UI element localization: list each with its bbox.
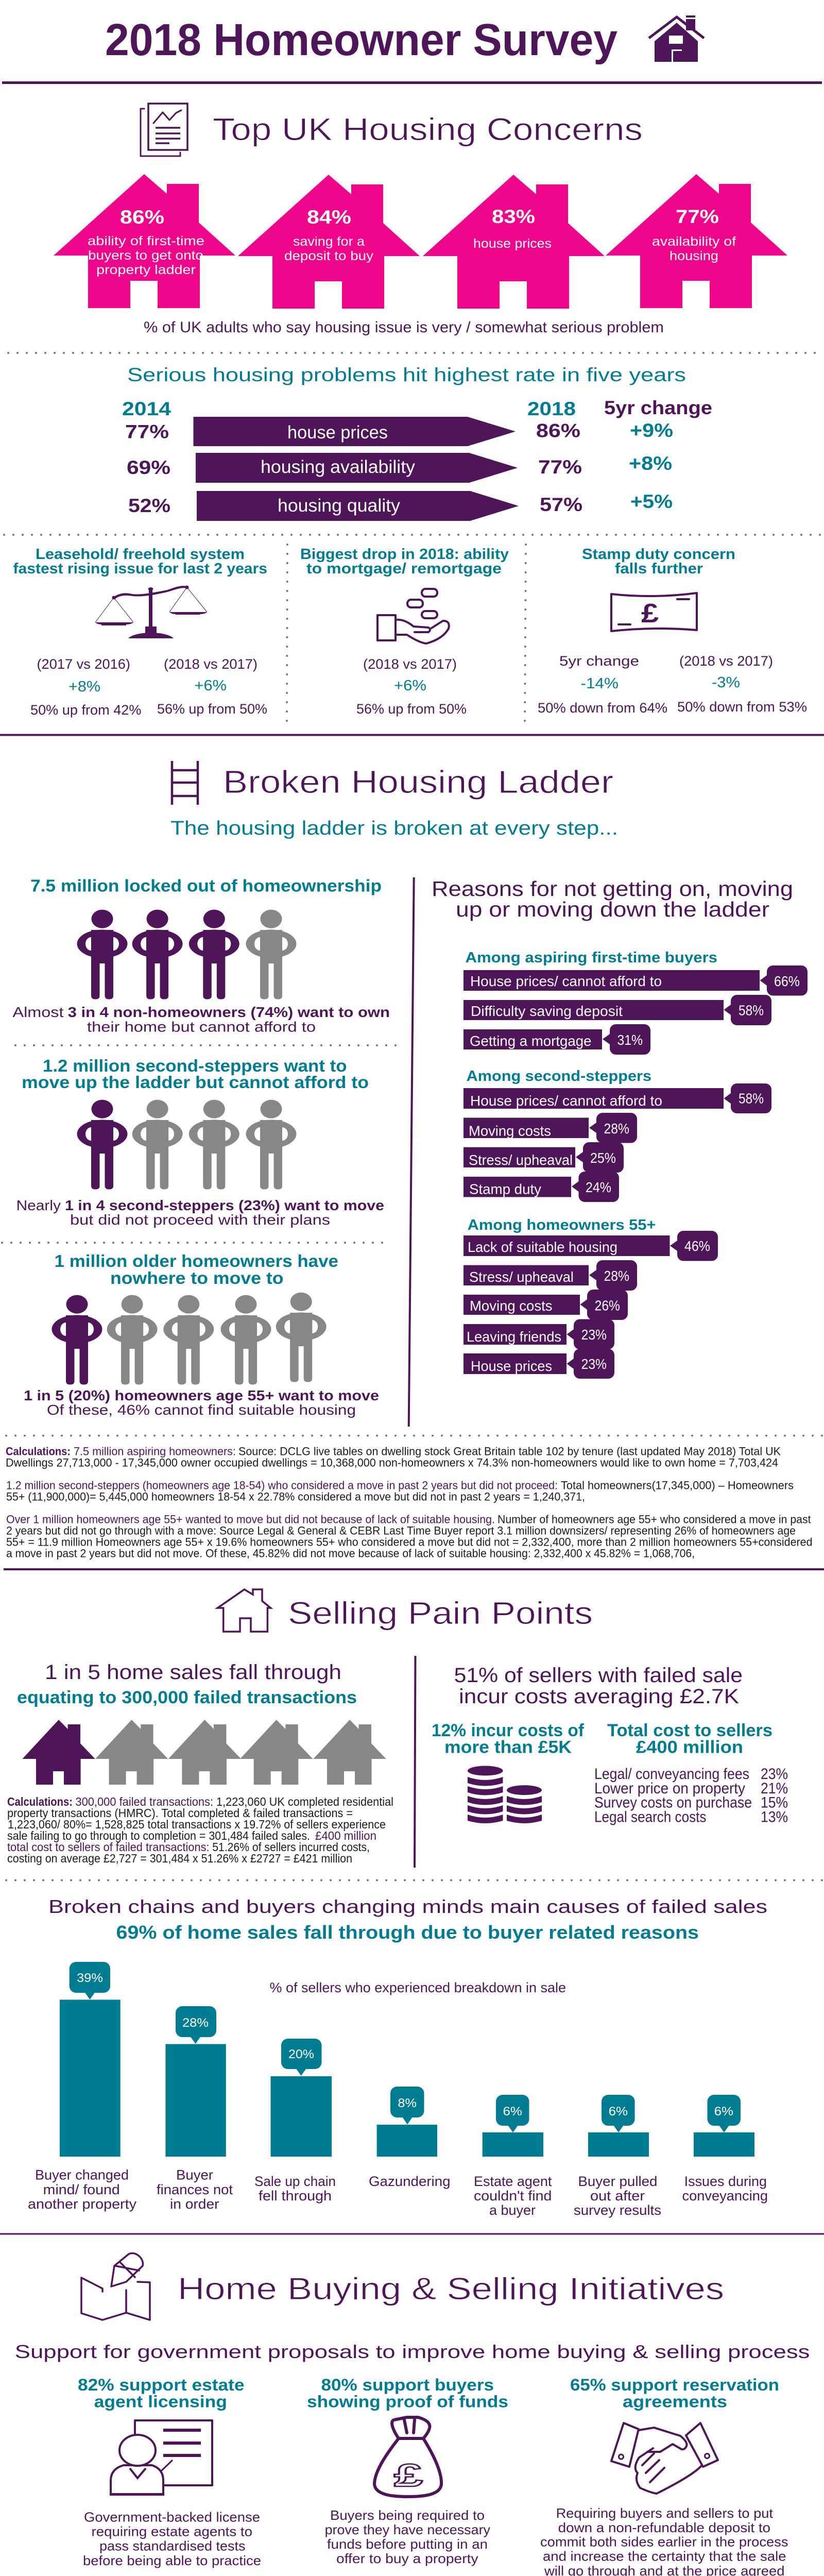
description: down a non-refundable deposit to xyxy=(558,2520,770,2535)
row: housing availability: housing availability xyxy=(261,457,416,477)
row: housing quality: 52% xyxy=(128,495,170,516)
bar: moving costs 26%: Moving costs xyxy=(470,1298,552,1314)
icon: ladder xyxy=(172,761,198,805)
icon: hand with coins xyxy=(377,589,449,643)
bar: stress upheaval 25% xyxy=(464,1142,624,1173)
subheading: 12%: more than £5K xyxy=(444,1738,572,1757)
heading: incur costs averaging £2.7K xyxy=(459,1685,739,1708)
bar: getting a mortgage 31% xyxy=(464,1024,650,1055)
column headers: 5yr change xyxy=(604,397,712,418)
heading: 82% support estate xyxy=(78,2376,244,2394)
chart caption: % of sellers who experienced breakdown in sale xyxy=(270,1980,566,1995)
heading: Biggest drop in 2018: ability xyxy=(300,546,509,563)
comparison figures: +6% xyxy=(394,677,426,694)
caption: Nearly xyxy=(16,1197,61,1213)
description xyxy=(83,2509,261,2568)
text block: ladder calculations: 55+ = 11.9 million Homeowners age 55+ x 19.6% homeowners 55+ who considered a move but did not = 2,332,400, more than 2 million homeowners 55+considered xyxy=(6,1535,813,1548)
caption: 1 in 4 second-steppers (23%) want to move xyxy=(65,1197,384,1213)
house: 77%: housing xyxy=(670,249,718,263)
bar: buyer changed mind 39%: mind/ found xyxy=(43,2182,120,2197)
icon: map and pencil xyxy=(81,2253,150,2320)
text block: calculations: £400 million xyxy=(315,1829,376,1842)
description: funds before putting in an xyxy=(327,2536,488,2552)
subheading: total cost: Total cost to sellers xyxy=(607,1721,772,1740)
description: requiring estate agents to xyxy=(92,2523,252,2539)
icon: money bag: £ xyxy=(394,2458,423,2494)
section header: home buying and selling initiatives xyxy=(81,2253,724,2320)
bar: buyer changed mind 39%: Buyer changed xyxy=(35,2167,129,2182)
bar: house prices 66%: House prices/ cannot afford to xyxy=(470,973,662,989)
bar: buyer finances 28% xyxy=(157,2006,233,2212)
heading xyxy=(78,2376,244,2411)
bar: buyer pulled out 6% xyxy=(574,2095,661,2218)
heading: 1 million older homeowners have xyxy=(55,1251,338,1270)
house: 77%: availability of xyxy=(652,234,736,249)
subheading: The housing ladder is broken at every step... xyxy=(170,818,618,839)
table: cost breakdown: Lower price on property xyxy=(594,1780,745,1797)
row: housing availability: 77% xyxy=(538,456,582,478)
icon: presenter with board xyxy=(110,2420,212,2496)
description: pass standardised tests xyxy=(99,2538,245,2553)
heading xyxy=(55,1251,338,1287)
subheading: 12%: 12% incur costs of xyxy=(432,1721,585,1740)
icon: house outline xyxy=(217,1589,271,1632)
subheading: first-time buyers: Among aspiring first-time buyers xyxy=(466,950,717,966)
house: 86%: 86% xyxy=(120,207,164,228)
description: offer to buy a property xyxy=(336,2551,478,2566)
description: Buyers being required to xyxy=(330,2507,485,2523)
heading: Serious housing problems hit highest rate in five years xyxy=(127,364,686,385)
bar: estate agent 6%: Estate agent xyxy=(474,2174,552,2189)
icon: house xyxy=(649,15,704,62)
bar: estate agent 6%: couldn't find xyxy=(474,2188,552,2204)
bar: getting a mortgage 31%: 31% xyxy=(617,1032,643,1048)
heading xyxy=(454,1664,743,1708)
row: house prices: 86% xyxy=(536,420,580,441)
text block: calculations: 300,000 failed transactions xyxy=(75,1795,210,1808)
comparison figures: +8% xyxy=(68,679,100,695)
description: prove they have necessary xyxy=(325,2522,490,2537)
table: cost breakdown: Survey costs on purchase xyxy=(594,1794,752,1811)
caption: their home but cannot afford to xyxy=(87,1019,316,1035)
panel: stamp duty xyxy=(538,546,807,716)
icon: handshake xyxy=(611,2423,718,2494)
caption xyxy=(24,1387,379,1418)
text block: calculations: total cost to sellers of failed transactions xyxy=(7,1840,206,1854)
bar: stamp duty 24%: 24% xyxy=(586,1179,611,1195)
caption: 3 in 4 non-homeowners (74%) want to own xyxy=(68,1004,390,1020)
comparison figures: +6% xyxy=(195,677,227,694)
people icons: 1 of 4 xyxy=(77,1100,297,1189)
text block: calculations: : 51.26% of sellers incurred costs, xyxy=(206,1840,370,1854)
bar: sale up chain 20%: Sale up chain xyxy=(254,2174,336,2189)
bar: getting a mortgage 31%: Getting a mortgage xyxy=(470,1033,591,1049)
text block: ladder calculations: Number of homeowners age 55+ who considered a move in past xyxy=(497,1513,811,1526)
table: cost breakdown: 23% xyxy=(761,1766,788,1783)
bar: buyer changed mind 39%: 39% xyxy=(77,1971,103,1985)
caption xyxy=(12,1004,390,1035)
row: housing quality: +5% xyxy=(630,491,673,512)
text block: ladder calculations: 1.2 million second-steppers (homeowners age 18-54) who considered a move in past 2 years but did not proceed: xyxy=(6,1479,558,1492)
bar: buyer pulled out 6%: survey results xyxy=(574,2202,661,2218)
row: house prices: +9% xyxy=(630,420,673,441)
table: cost breakdown: 15% xyxy=(761,1794,788,1811)
house: 83%: house prices xyxy=(473,236,552,251)
heading xyxy=(300,546,509,577)
bar: stress upheaval 28%: Stress/ upheaval xyxy=(469,1269,574,1285)
section: top UK housing concerns xyxy=(54,104,787,336)
bar: stress upheaval 25%: Stress/ upheaval xyxy=(469,1152,573,1168)
panel: second-steppers xyxy=(16,1056,384,1228)
bar: lack of suitable housing 46% xyxy=(464,1231,718,1261)
caption: Of these, 46% cannot find suitable housing xyxy=(47,1402,356,1418)
comparison figures: 5yr change xyxy=(559,653,639,669)
bar: lack of suitable housing 46%: 46% xyxy=(684,1238,710,1254)
heading: falls further xyxy=(615,561,703,577)
bar chart xyxy=(28,1962,768,2218)
table: cost breakdown xyxy=(594,1766,788,1826)
heading xyxy=(13,546,267,577)
text block: calculations: property transactions (HMRC). Total completed & failed transactions = xyxy=(7,1806,353,1820)
section: serious housing problems xyxy=(122,364,712,521)
subheading: second-steppers: Among second-steppers xyxy=(467,1068,651,1084)
bar: sale up chain 20% xyxy=(254,2039,336,2204)
section: causes of failed sales xyxy=(28,1896,768,2218)
heading: 65% support reservation xyxy=(570,2376,779,2394)
house icons: 1 of 5 xyxy=(22,1720,386,1785)
people icons: 3 of 4 xyxy=(77,910,297,999)
bar: moving costs 28%: 28% xyxy=(604,1121,629,1137)
comparison figures xyxy=(538,653,807,716)
text block: calculations xyxy=(7,1795,393,1865)
bar: house prices 66%: 66% xyxy=(774,973,800,989)
row: house prices: house prices xyxy=(287,422,388,443)
row: housing quality xyxy=(128,491,673,521)
house: 77% xyxy=(606,174,787,308)
heading: nowhere to move to xyxy=(110,1268,283,1287)
heading: top UK housing concerns: Top UK Housing Concerns xyxy=(213,112,643,147)
people icons: 1 of 5 xyxy=(52,1293,327,1385)
heading xyxy=(582,546,735,577)
heading: Reasons for not getting on, moving xyxy=(432,877,793,901)
title: 2018 Homeowner Survey xyxy=(105,15,617,65)
panel: reasons chart xyxy=(432,877,808,1379)
bar: estate agent 6%: 6% xyxy=(503,2105,522,2119)
subheading: 12% xyxy=(432,1721,585,1757)
heading: up or moving down the ladder xyxy=(456,897,769,921)
bar: house prices 58%: House prices/ cannot afford to xyxy=(470,1093,662,1109)
bar: house prices 23%: 23% xyxy=(581,1356,607,1372)
bar: stress upheaval 25%: 25% xyxy=(590,1150,616,1166)
subheading: total cost: £400 million xyxy=(636,1738,743,1757)
bar: sale up chain 20%: 20% xyxy=(288,2047,314,2061)
row: house prices xyxy=(125,417,673,446)
house: 84%: deposit to buy xyxy=(284,249,374,263)
heading: Broken Housing Ladder xyxy=(223,765,613,800)
bar: stress upheaval 28%: 28% xyxy=(604,1268,629,1284)
text block: ladder calculations: Source: DCLG live tables on dwelling stock Great Britain table 102 by tenure (last updated May 2018) Total UK xyxy=(238,1445,781,1458)
text block: ladder calculations: Over 1 million homeowners age 55+ wanted to move but did not because of lack of suitable housing. xyxy=(6,1513,495,1526)
section header: selling pain points xyxy=(217,1589,593,1632)
heading: Broken chains and buyers changing minds main causes of failed sales xyxy=(48,1896,767,1917)
heading: agent licensing xyxy=(94,2393,227,2411)
house: 83% xyxy=(423,175,605,309)
comparison figures: 50% up from 42% xyxy=(30,702,141,718)
description: Requiring buyers and sellers to put xyxy=(556,2505,774,2521)
table: cost breakdown: Legal search costs xyxy=(594,1809,706,1826)
bar: house prices 23% xyxy=(464,1349,614,1379)
bar: stamp duty 24% xyxy=(464,1172,619,1202)
heading: Home Buying & Selling Initiatives xyxy=(178,2272,724,2306)
heading: move up the ladder but cannot afford to xyxy=(22,1073,369,1092)
heading xyxy=(432,877,793,921)
house: 86%: buyers to get onto xyxy=(88,248,203,263)
column headers xyxy=(122,397,712,419)
bar: stamp duty 24%: Stamp duty xyxy=(469,1181,541,1197)
table: cost breakdown: 13% xyxy=(761,1809,788,1826)
bar: leaving friends 23% xyxy=(464,1319,614,1349)
bar: stress upheaval 28% xyxy=(464,1260,637,1291)
bar: issues during conveyancing 6%: 6% xyxy=(714,2105,733,2119)
bar: buyer finances 28%: 28% xyxy=(182,2016,209,2030)
bar: moving costs 26%: 26% xyxy=(595,1297,620,1314)
heading: 51% of sellers with failed sale xyxy=(454,1664,743,1687)
bar: difficulty saving deposit 58% xyxy=(464,995,771,1025)
house: 84%: 84% xyxy=(307,207,351,228)
text block: calculations: : 1,223,060 UK completed residential xyxy=(210,1795,393,1808)
comparison figures: (2018 vs 2017) xyxy=(164,656,258,672)
bar: house prices 23%: House prices xyxy=(471,1358,552,1374)
bar: house prices 58%: 58% xyxy=(739,1090,764,1107)
panel: seller costs xyxy=(432,1664,788,1826)
heading: to mortgage/ remortgage xyxy=(306,561,502,577)
heading: fastest rising issue for last 2 years xyxy=(13,561,267,577)
row: housing quality: housing quality xyxy=(278,496,401,516)
description: commit both sides earlier in the process xyxy=(540,2534,788,2550)
bar: moving costs 28% xyxy=(464,1113,637,1143)
caption: % of UK adults who say housing issue is very / somewhat serious problem xyxy=(144,319,664,336)
bar: difficulty saving deposit 58%: Difficulty saving deposit xyxy=(471,1003,623,1019)
panel: failed sales xyxy=(7,1661,393,1865)
description xyxy=(540,2505,788,2576)
text block: calculations: Calculations: xyxy=(7,1795,73,1808)
panel: older homeowners xyxy=(24,1251,379,1418)
description: Government-backed license xyxy=(84,2509,260,2524)
house: 86% xyxy=(54,174,235,308)
heading: government proposals: Support for government proposals to improve home buying & selling process xyxy=(15,2341,810,2362)
icon: scales xyxy=(95,585,207,638)
text block: ladder calculations xyxy=(6,1445,813,1560)
comparison figures: (2018 vs 2017) xyxy=(679,653,773,669)
bar: estate agent 6%: a buyer xyxy=(489,2202,536,2218)
text block: ladder calculations: 55+ (11,900,000)= 5,445,000 homeowners 18-54 x 22.78% considered a move but did not in past 2 years = 1,240,371, xyxy=(6,1490,585,1503)
bar: gazundering 8% xyxy=(369,2087,450,2189)
bar: house prices 58% xyxy=(464,1083,771,1113)
heading: showing proof of funds xyxy=(307,2393,508,2411)
icon: money bag xyxy=(374,2417,441,2497)
bar: leaving friends 23%: Leaving friends xyxy=(467,1329,561,1345)
heading: Stamp duty concern xyxy=(582,546,735,563)
bar: buyer pulled out 6%: 6% xyxy=(609,2105,628,2119)
bar: house prices 66% xyxy=(464,965,808,995)
panel: locked out xyxy=(12,876,390,1035)
row: housing availability: +8% xyxy=(629,453,672,474)
bar: gazundering 8%: 8% xyxy=(398,2096,417,2110)
comparison figures: 56% up from 50% xyxy=(157,701,267,717)
table: cost breakdown: 21% xyxy=(761,1780,788,1797)
panel: reservation agreements xyxy=(540,2376,788,2576)
bar: estate agent 6% xyxy=(474,2095,552,2218)
comparison figures: 50% down from 53% xyxy=(677,699,807,715)
bar: moving costs 28%: Moving costs xyxy=(469,1123,551,1139)
house: 84%: saving for a xyxy=(293,234,365,249)
text block: ladder calculations: Dwellings 27,713,000 - 17,345,000 owner occupied dwellings = 10,368,000 non-homeowners x 74.3% non-homeowners would like to own home = 7,703,424 xyxy=(6,1456,778,1469)
description xyxy=(325,2507,490,2566)
icon: banknote: £ xyxy=(641,599,659,629)
heading: Selling Pain Points xyxy=(288,1596,593,1631)
bar: buyer finances 28%: finances not xyxy=(157,2182,233,2197)
comparison figures xyxy=(30,656,267,718)
panel: leasehold freehold xyxy=(13,546,267,718)
caption xyxy=(16,1197,384,1228)
text block: ladder calculations: Calculations: xyxy=(6,1445,71,1458)
bar: issues during conveyancing 6%: Issues during xyxy=(684,2174,767,2189)
subheading: homeowners 55+: Among homeowners 55+ xyxy=(468,1217,656,1233)
section header: broken housing ladder xyxy=(170,761,618,839)
icon: banknote xyxy=(611,593,697,631)
heading: agreements xyxy=(623,2393,727,2411)
caption: 1 in 5 (20%) homeowners age 55+ want to move xyxy=(24,1387,379,1403)
column headers: 2014 xyxy=(122,398,171,419)
text block: calculations: costing on average £2,727 = 301,484 x 51.26% x £2727 = £421 million xyxy=(7,1852,352,1865)
text block: ladder calculations: Total homeowners(17,345,000) – Homeowners xyxy=(561,1479,794,1492)
heading: 80% support buyers xyxy=(321,2376,494,2394)
house: 83%: 83% xyxy=(492,206,535,227)
heading: Leasehold/ freehold system xyxy=(36,546,245,563)
row: housing availability xyxy=(127,453,672,483)
subheading: 69% of home sales fall through due to buyer related reasons xyxy=(116,1922,699,1943)
caption: Almost xyxy=(12,1004,64,1020)
text block: ladder calculations: a move in past 2 years but did not move. Of these, 45.82% did not move because of lack of suitable housing: 2,332,400 x 45.82% = 1,068,706, xyxy=(6,1547,695,1560)
comparison figures xyxy=(356,656,467,717)
icon: coin stacks xyxy=(468,1766,542,1823)
subheading: total cost xyxy=(607,1721,772,1757)
text block: calculations: 1,223,060/ 80%= 1,528,825 total transactions x 19.72% of sellers experience xyxy=(8,1818,386,1831)
row: housing quality: 57% xyxy=(540,494,582,515)
bar: lack of suitable housing 46%: Lack of suitable housing xyxy=(468,1239,617,1255)
panel: proof of funds xyxy=(307,2376,508,2566)
text block: ladder calculations: 7.5 million aspiring homeowners: xyxy=(74,1445,236,1458)
table: cost breakdown: Legal/ conveyancing fees xyxy=(594,1766,749,1783)
heading xyxy=(22,1056,369,1092)
text block: calculations: sale failing to go through to completion = 301,484 failed sales. xyxy=(7,1829,310,1842)
panel: estate agent licensing xyxy=(78,2376,261,2568)
bar: buyer pulled out 6%: out after xyxy=(590,2188,645,2204)
bar: issues during conveyancing 6%: conveyancing xyxy=(682,2188,768,2204)
bar: difficulty saving deposit 58%: 58% xyxy=(739,1003,764,1018)
bar: buyer pulled out 6%: Buyer pulled xyxy=(578,2174,657,2189)
text block: ladder calculations: 2 years but did not go through with a move: Source Legal & General & CEBR Last Time Buyer report 3.1 million downsizers/ representing 26% of homeowners age xyxy=(6,1524,796,1537)
description: before being able to practice xyxy=(83,2553,261,2568)
bar: gazundering 8%: Gazundering xyxy=(369,2174,450,2189)
house: 84% xyxy=(238,175,420,309)
caption: but did not proceed with their plans xyxy=(70,1212,330,1228)
comparison figures: (2018 vs 2017) xyxy=(363,656,457,672)
row: house prices: 77% xyxy=(125,421,169,442)
comparison figures: -3% xyxy=(712,674,740,691)
bar: buyer finances 28%: Buyer xyxy=(176,2167,213,2182)
heading xyxy=(307,2376,508,2411)
heading: 1.2 million second-steppers want to xyxy=(43,1056,347,1075)
bar: moving costs 26% xyxy=(464,1290,628,1320)
subheading: equating to 300,000 failed transactions xyxy=(17,1688,357,1707)
bar: buyer finances 28%: in order xyxy=(170,2196,219,2212)
bar: buyer changed mind 39%: another property xyxy=(28,2196,137,2212)
description: and increase the certainty that the sale xyxy=(543,2549,786,2564)
comparison figures: 56% up from 50% xyxy=(356,701,467,717)
bar: leaving friends 23%: 23% xyxy=(581,1327,607,1343)
heading: 1 in 5 home sales fall through xyxy=(45,1661,341,1684)
house: 86%: property ladder xyxy=(96,263,196,277)
panel: biggest drop xyxy=(300,546,509,717)
bar: sale up chain 20%: fell through xyxy=(259,2188,332,2204)
house: 77%: 77% xyxy=(676,206,719,227)
icon: chart document xyxy=(141,104,187,156)
heading xyxy=(570,2376,779,2411)
bar: buyer changed mind 39% xyxy=(28,1962,137,2212)
bar: issues during conveyancing 6% xyxy=(682,2095,768,2204)
column headers: 2018 xyxy=(527,398,576,419)
row: housing availability: 69% xyxy=(127,457,170,478)
heading: 7.5 million locked out of homeownership xyxy=(30,876,382,895)
comparison figures: 50% down from 64% xyxy=(538,700,667,716)
comparison figures: -14% xyxy=(581,675,619,692)
comparison figures: (2017 vs 2016) xyxy=(37,656,130,672)
house: 86%: ability of first-time xyxy=(88,234,204,248)
